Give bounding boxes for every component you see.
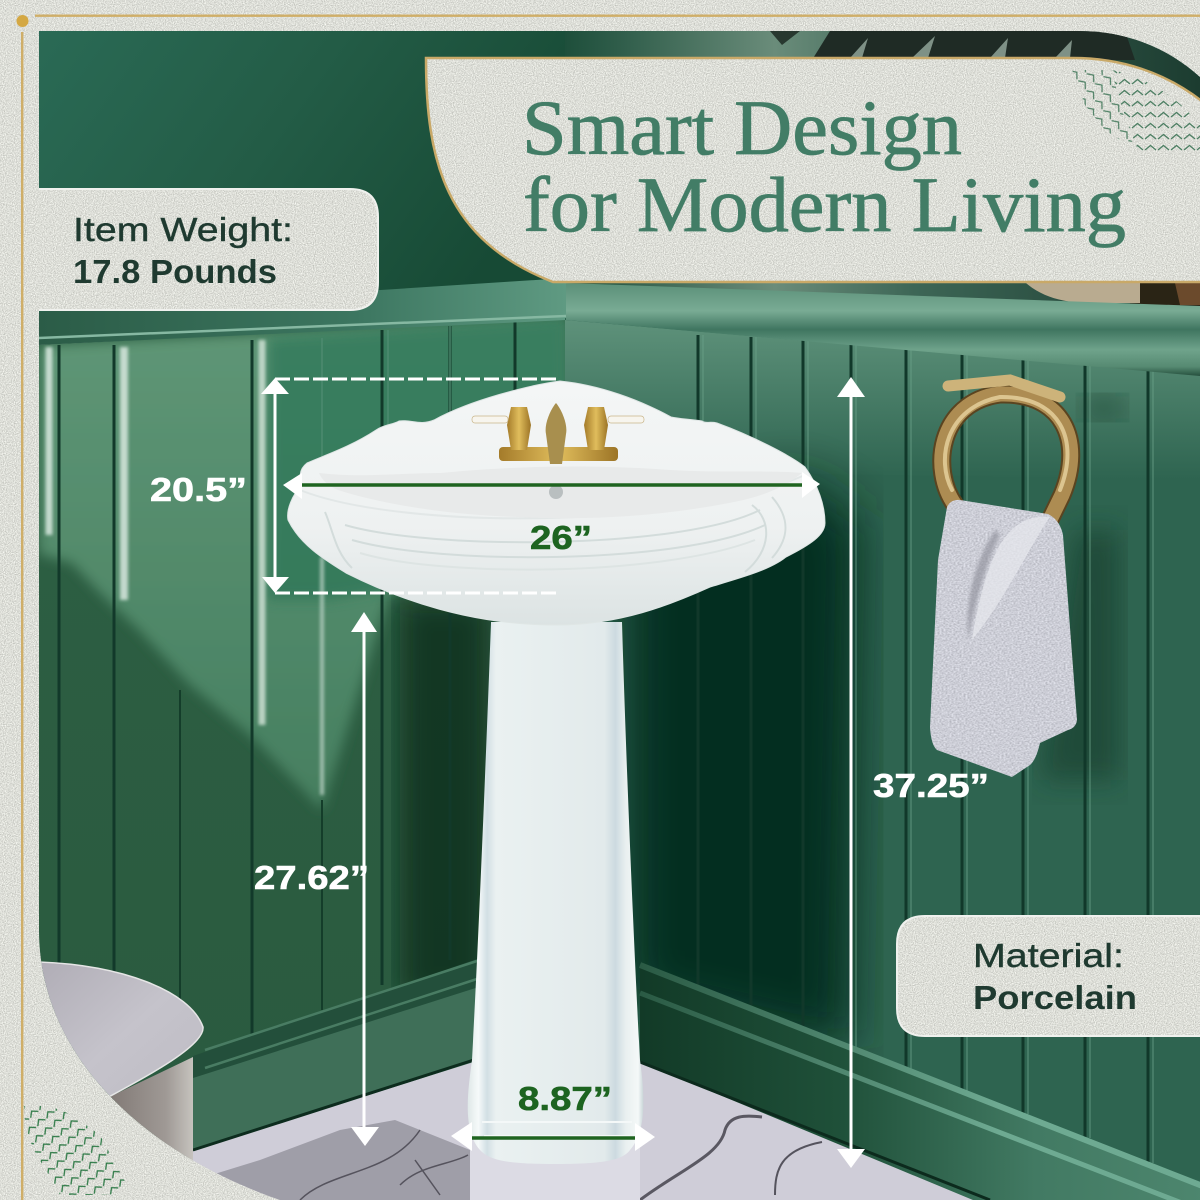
dimension: base 8.87: 8.87” — [518, 1080, 612, 1117]
dimension: depth 20.5 — [150, 378, 557, 593]
leaf sprig top right — [1072, 70, 1200, 155]
pedestal sink — [288, 381, 825, 1200]
upper right wall — [566, 31, 1200, 304]
material callout: Porcelain — [973, 979, 1137, 1016]
title text — [522, 84, 1126, 248]
drain hole — [549, 485, 563, 499]
dimension: width 26 — [283, 472, 820, 556]
basin body — [288, 381, 825, 625]
upper left wall — [39, 31, 566, 331]
left wall rail — [39, 278, 566, 345]
ring shadow — [1080, 395, 1125, 420]
title text: for Modern Living — [523, 161, 1126, 248]
item weight callout: Item Weight: — [73, 211, 293, 248]
dimension: total height 37.25 — [837, 377, 989, 1168]
left rail highlight — [39, 316, 566, 338]
waste bin — [39, 962, 203, 1175]
dimension: width 26: 26” — [530, 519, 592, 556]
towel fold — [972, 517, 1050, 640]
item weight callout: 17.8 Pounds — [73, 253, 277, 290]
left wall lit area — [39, 318, 566, 810]
title panel — [426, 58, 1200, 283]
faucet — [472, 403, 644, 464]
floor — [190, 1062, 972, 1200]
towel shadow — [1040, 530, 1120, 780]
material callout — [897, 916, 1200, 1036]
left wall panelling — [39, 318, 566, 1200]
dimension: floor to basin 27.62: 27.62” — [254, 859, 369, 896]
marble texture — [195, 1120, 470, 1200]
left wall side panel tint — [268, 318, 566, 600]
dimension: total height 37.25: 37.25” — [873, 767, 989, 804]
marble veins — [300, 1116, 822, 1200]
basin ribs — [300, 475, 805, 572]
dimension: base 8.87 — [451, 1080, 655, 1151]
right wall rail — [566, 283, 1200, 376]
towel ring and towel — [930, 380, 1077, 777]
right wall grooves — [698, 335, 1148, 1163]
towel shadow crease — [967, 530, 1000, 640]
plant leaves — [770, 31, 1135, 60]
left baseboard — [193, 958, 485, 1150]
right baseboard — [640, 965, 1200, 1200]
title text: Smart Design — [522, 84, 962, 171]
towel — [930, 500, 1077, 777]
right wall dark shadow — [625, 480, 860, 1050]
right wall groove highlights — [703, 335, 1153, 1163]
right wall panelling — [565, 318, 1200, 1200]
left wall dark near pedestal — [400, 600, 490, 1000]
right wall highlight — [565, 320, 1200, 454]
dimension: depth 20.5: 20.5” — [150, 471, 247, 508]
left wall grooves — [49, 322, 515, 1040]
pedestal — [468, 622, 643, 1200]
dimension: floor to basin 27.62 — [254, 612, 379, 1146]
towel ring — [942, 380, 1071, 528]
basin bowl interior — [319, 467, 802, 518]
item weight callout — [39, 189, 378, 310]
material callout: Material: — [973, 937, 1124, 974]
leaf sprig bottom left — [24, 1106, 127, 1195]
shelf bowl — [1026, 283, 1200, 306]
